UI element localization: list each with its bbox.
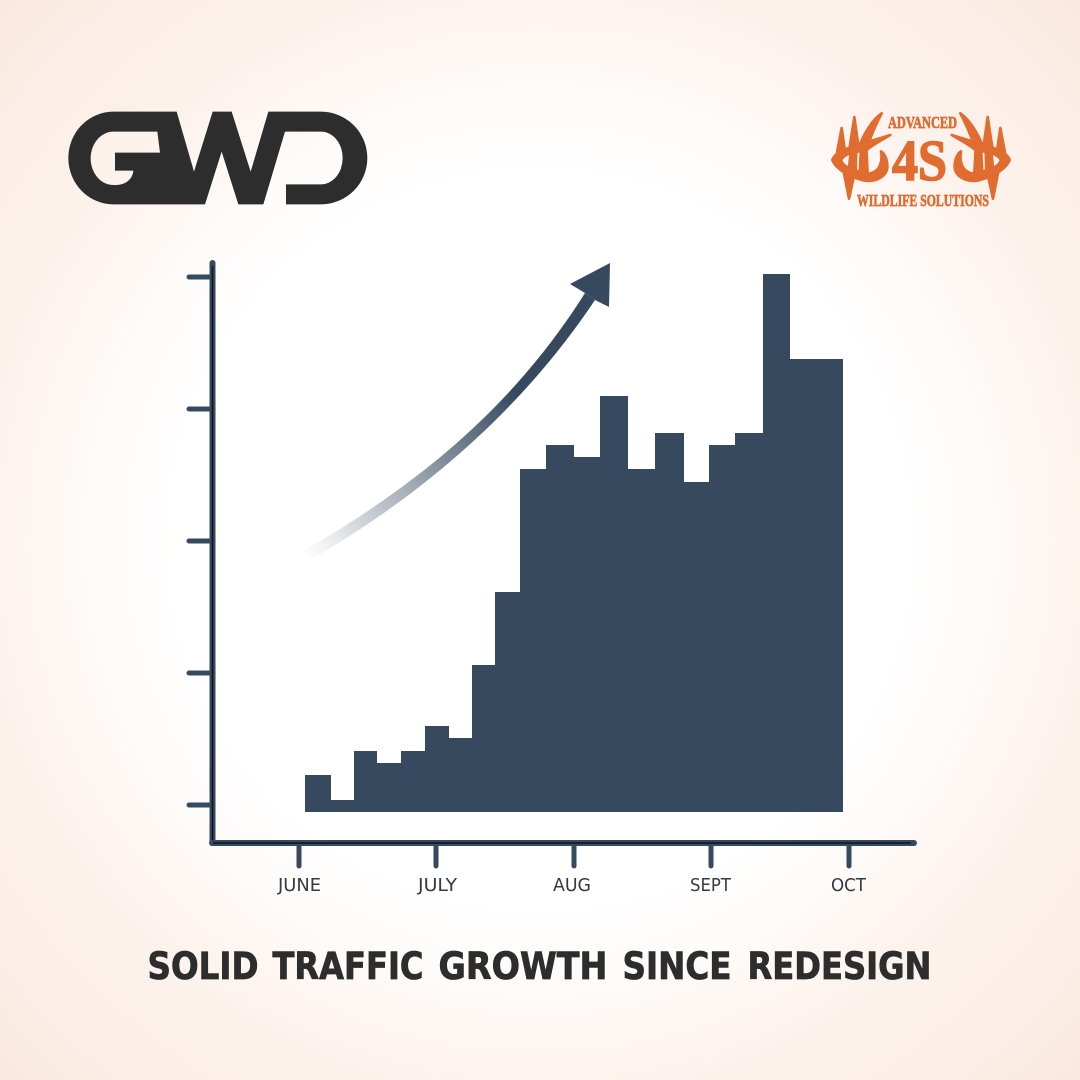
title: [148, 945, 932, 988]
label: Aug: AUG: [553, 876, 591, 896]
bars: monthly traffic histogram: [305, 274, 843, 812]
title: GROWTH: [438, 945, 608, 988]
label: July: JULY: [417, 876, 457, 896]
label: June: JUNE: [277, 876, 321, 896]
label: Sept: SEPT: [690, 876, 731, 896]
logo text: advanced: ADVANCED: [888, 113, 957, 132]
icon: left antler: [832, 113, 890, 199]
logo text: wildlife solutions: WILDLIFE SOLUTIONS: [857, 191, 989, 210]
y axis with ticks: [189, 263, 212, 843]
title: REDESIGN: [748, 945, 932, 988]
logo text: 4S: 4S: [892, 128, 947, 193]
arrow: upward growth trend: [300, 263, 610, 563]
title: SOLID: [148, 945, 258, 988]
logo: GWD: [68, 112, 367, 204]
icon: right antler: [952, 113, 1010, 199]
title: TRAFFIC: [272, 945, 424, 988]
chart: traffic growth: [189, 263, 914, 896]
title: SINCE: [622, 945, 732, 988]
label: Oct: OCT: [831, 876, 866, 896]
x axis with ticks: [212, 843, 914, 866]
x axis labels: [277, 876, 866, 896]
logo: Advanced 4S Wildlife Solutions: [832, 113, 1010, 210]
